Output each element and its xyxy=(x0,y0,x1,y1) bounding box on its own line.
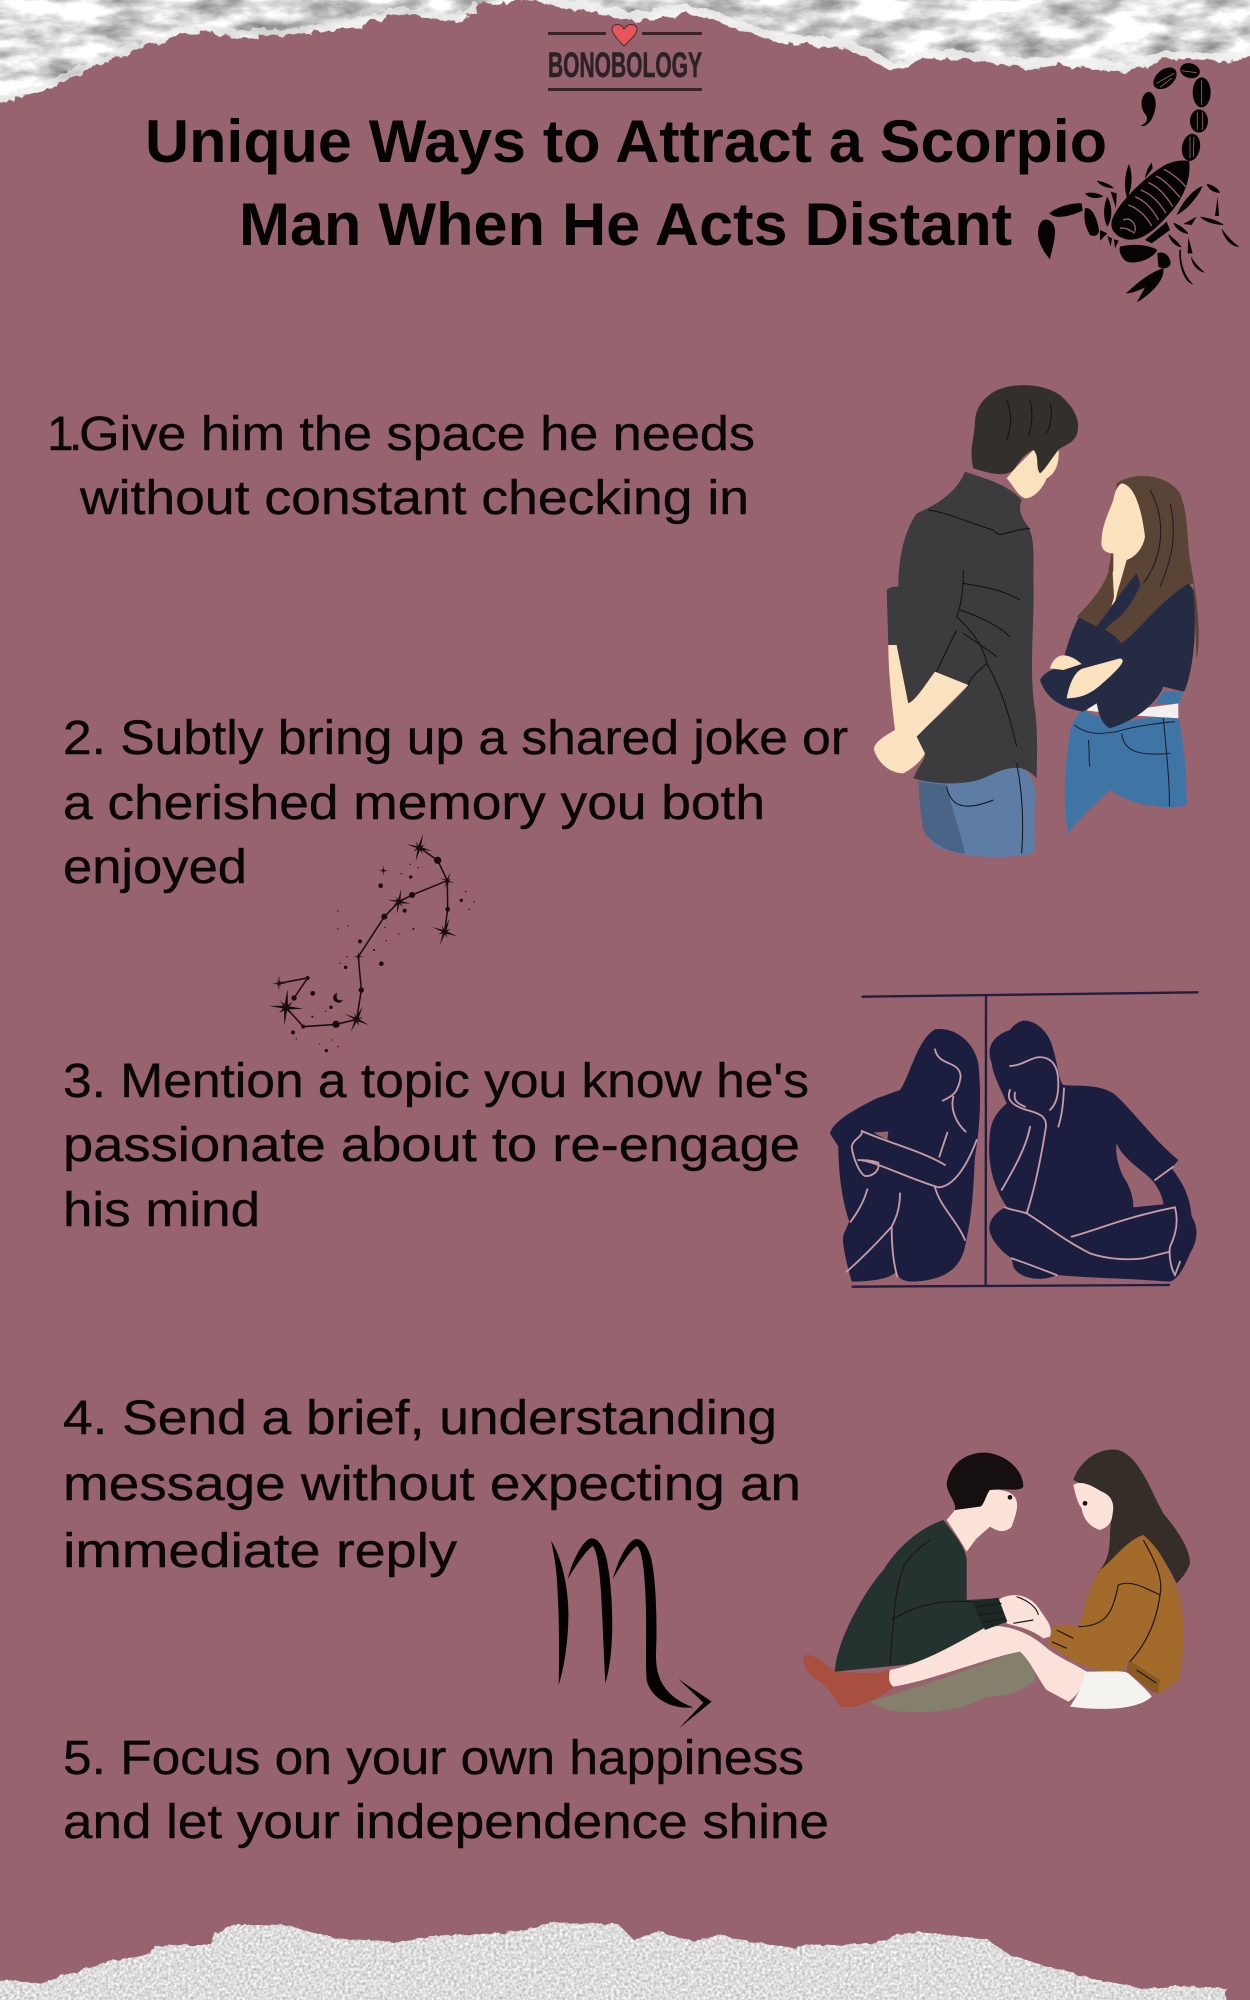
title: Man When He Acts Distant xyxy=(239,191,1012,258)
title: Unique Ways to Attract a Scorpio xyxy=(145,108,1107,175)
title xyxy=(145,108,1107,258)
illustration: couple back to back divided by a wall xyxy=(830,992,1198,1287)
text item 2 xyxy=(63,712,848,894)
text item 5: and let your independence shine xyxy=(63,1796,829,1849)
text item 3 xyxy=(63,1055,809,1237)
text item 4: 4. Send a brief, understanding xyxy=(63,1392,777,1445)
text item 4: immediate reply xyxy=(63,1525,457,1578)
text item 4: message without expecting an xyxy=(63,1458,801,1511)
text item 2: a cherished memory you both xyxy=(63,777,765,830)
icon: scorpius constellation xyxy=(267,831,475,1052)
logo: Bonobology: BONOBOLOGY xyxy=(548,46,702,85)
text item 1: Give him the space he needs xyxy=(79,408,755,461)
icon: scorpio zodiac glyph xyxy=(551,1538,712,1728)
icon: scorpion xyxy=(1038,61,1239,303)
illustration: seated couple holding hands xyxy=(803,1449,1190,1712)
text item 2: enjoyed xyxy=(63,841,247,894)
text item 5 xyxy=(63,1732,829,1849)
text item 3: passionate about to re-engage xyxy=(63,1119,800,1172)
text item 1 xyxy=(47,408,755,525)
text item 3: his mind xyxy=(63,1184,260,1237)
text item 1: 1. xyxy=(47,408,82,461)
text item 5: 5. Focus on your own happiness xyxy=(63,1732,804,1785)
text item 1: without constant checking in xyxy=(79,472,749,525)
torn paper top xyxy=(0,0,1250,110)
text item 2: 2. Subtly bring up a shared joke or xyxy=(63,712,848,765)
text item 3: 3. Mention a topic you know he's xyxy=(63,1055,809,1108)
text item 4 xyxy=(63,1392,801,1578)
illustration: man and woman standing xyxy=(874,385,1199,857)
torn paper bottom xyxy=(0,1923,1226,2000)
logo: Bonobology xyxy=(548,24,702,91)
